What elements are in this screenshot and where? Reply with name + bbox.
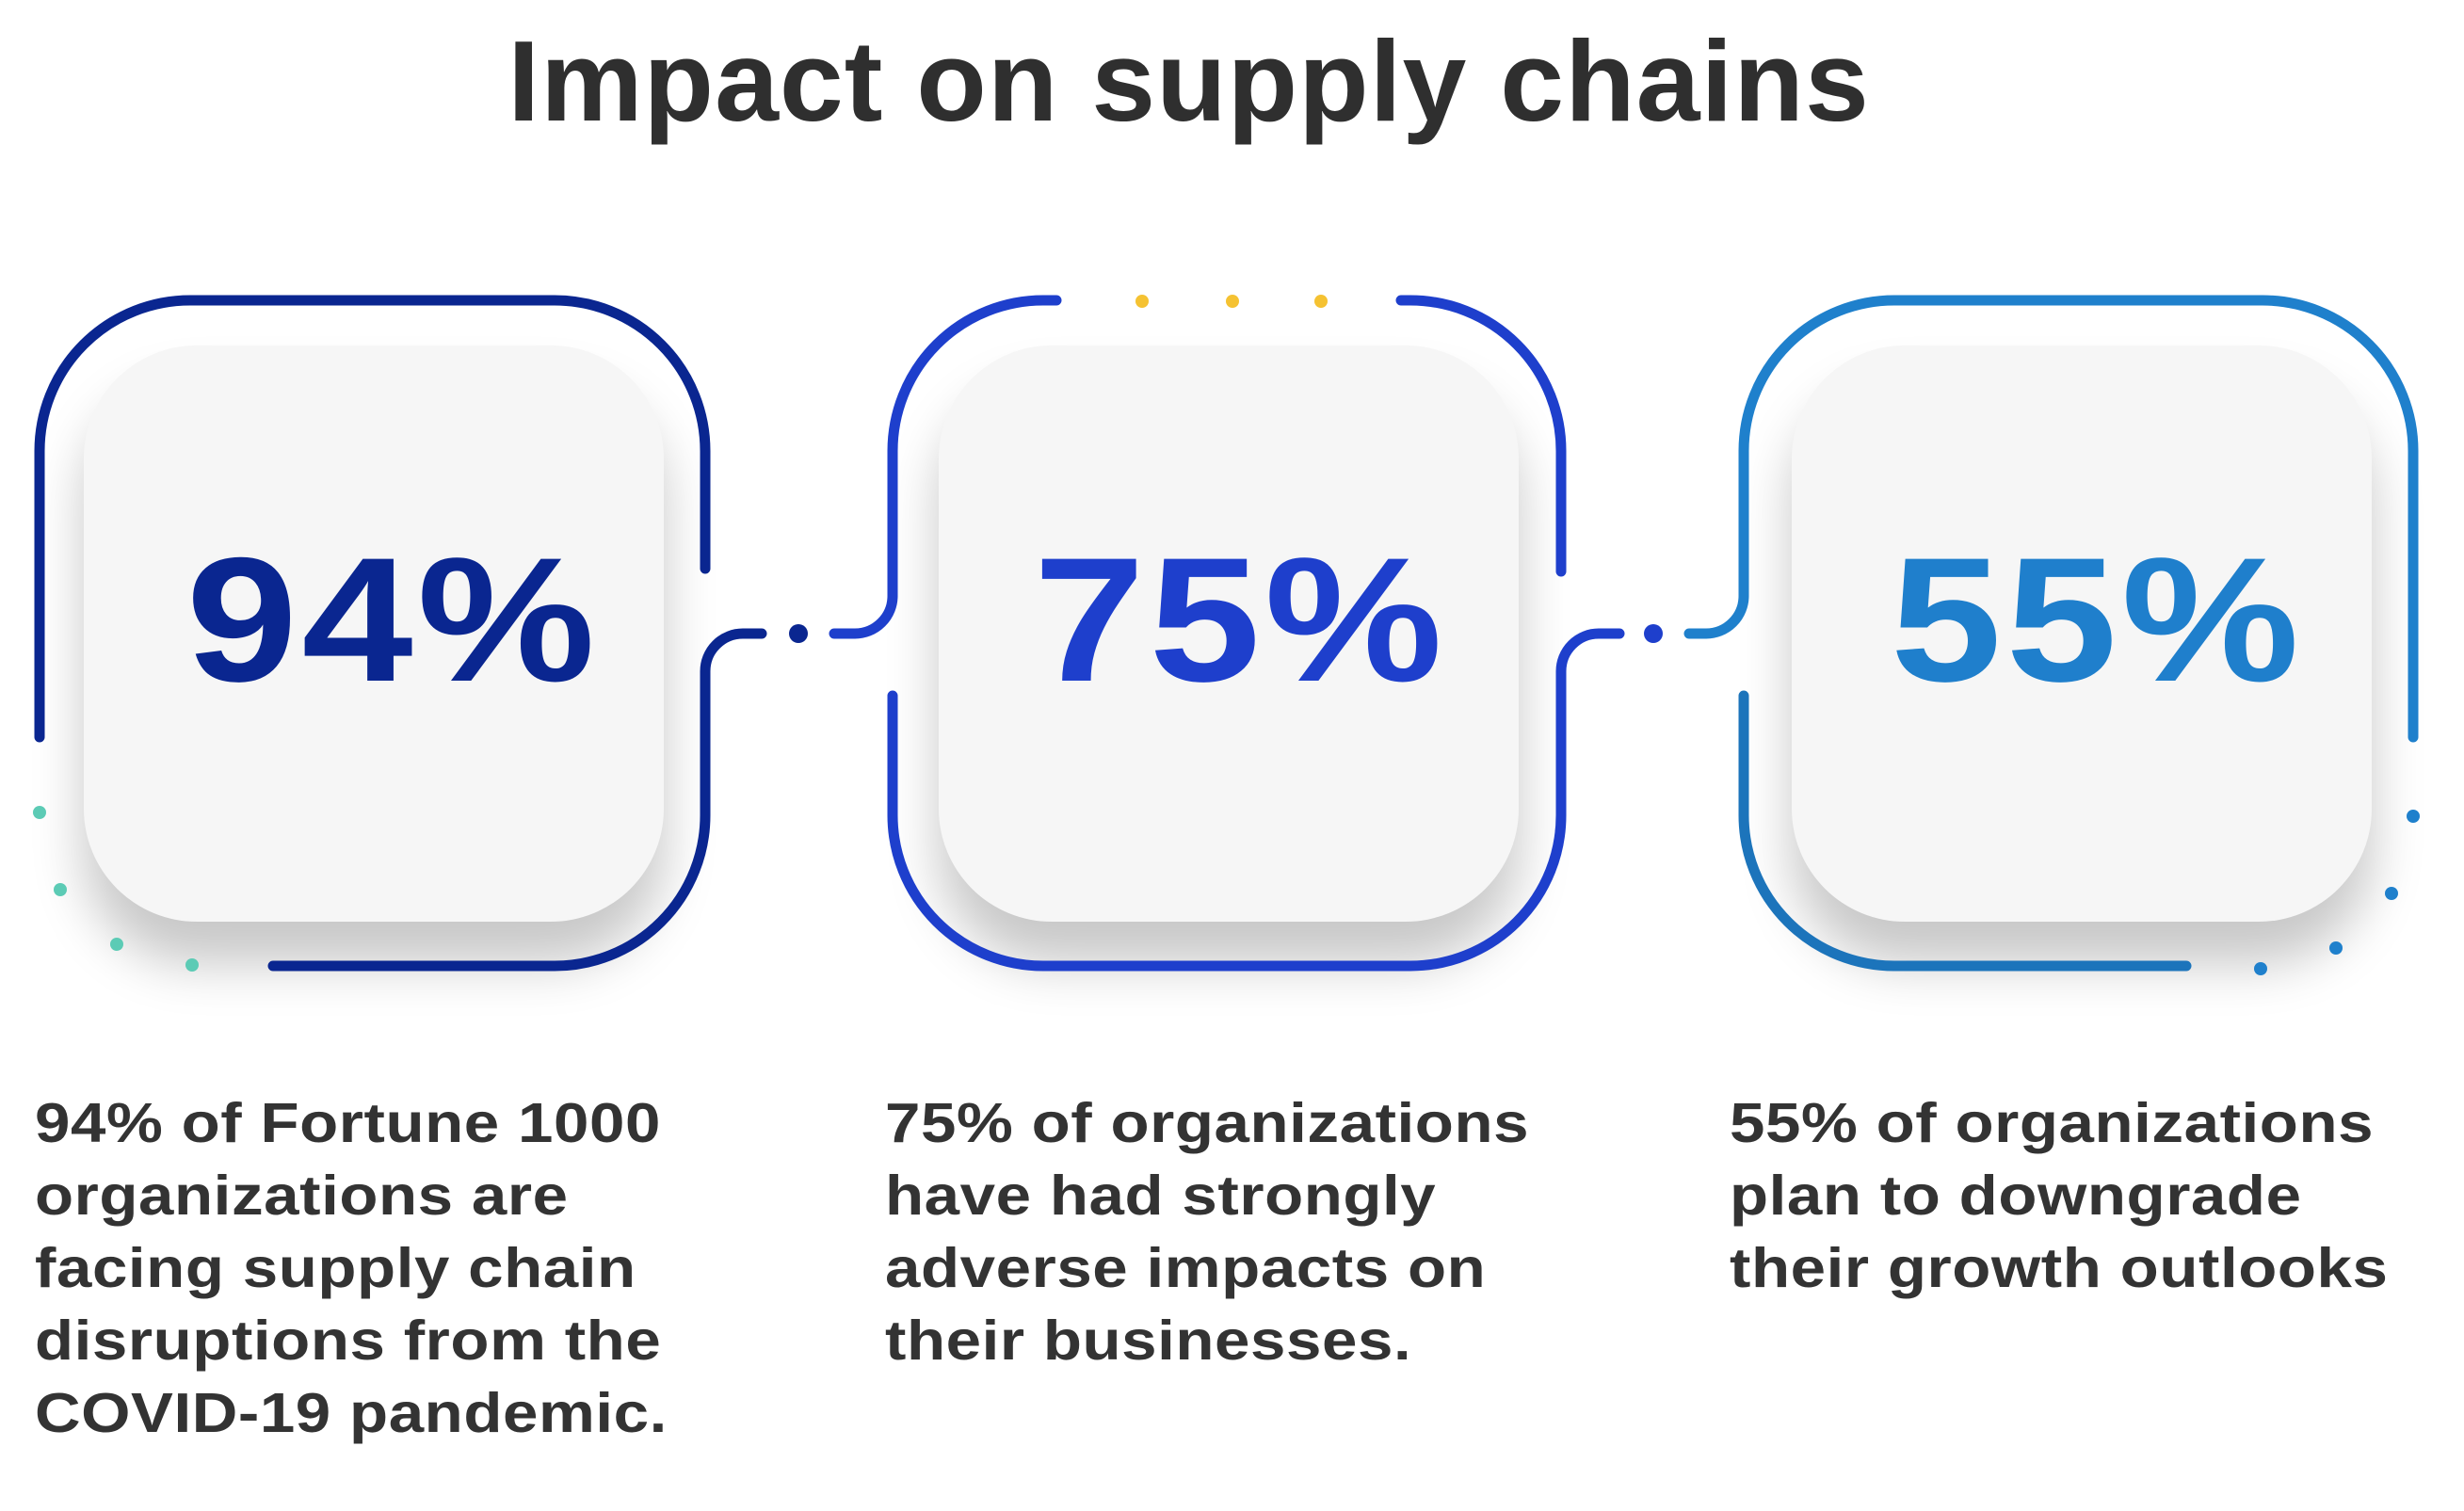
card: 55%: 55%: [1891, 521, 2303, 718]
text: panel 3 description: 55% of organizations: [1730, 1092, 2374, 1154]
text: panel 2 description: [885, 1092, 1529, 1372]
card: 55%: [1792, 346, 2372, 922]
text: panel 1 description: disruptions from the: [35, 1310, 661, 1372]
connector dots: [789, 624, 1663, 643]
text: panel 1 description: COVID-19 pandemic.: [35, 1382, 668, 1444]
card: 94%: [84, 346, 664, 922]
card: 75%: [939, 346, 1519, 922]
text: panel 1 description: facing supply chain: [35, 1237, 636, 1299]
text: panel 1 description: 94% of Fortune 1000: [35, 1092, 661, 1154]
yellow dots: [1135, 295, 1328, 308]
title: Impact on supply chains: [507, 17, 1870, 145]
frame: panel 1: [40, 300, 762, 966]
blue dots: [2254, 810, 2420, 975]
text: panel 3 description: their growth outlooks: [1730, 1237, 2388, 1299]
frame: panel 2: [834, 300, 1619, 966]
frame: panel 3: [1689, 300, 2413, 966]
text: panel 1 description: [35, 1092, 668, 1444]
text: panel 2 description: their businesses.: [885, 1310, 1411, 1372]
text: panel 2 description: adverse impacts on: [885, 1237, 1486, 1299]
text: panel 2 description: 75% of organizations: [885, 1092, 1529, 1154]
text: panel 3 description: plan to downgrade: [1730, 1165, 2302, 1227]
teal dots: [33, 806, 199, 972]
text: panel 1 description: organizations are: [35, 1165, 569, 1227]
card: 94%: 94%: [186, 521, 599, 718]
text: panel 3 description: [1730, 1092, 2388, 1299]
card: 75%: 75%: [1034, 521, 1446, 718]
text: panel 2 description: have had strongly: [885, 1165, 1436, 1227]
